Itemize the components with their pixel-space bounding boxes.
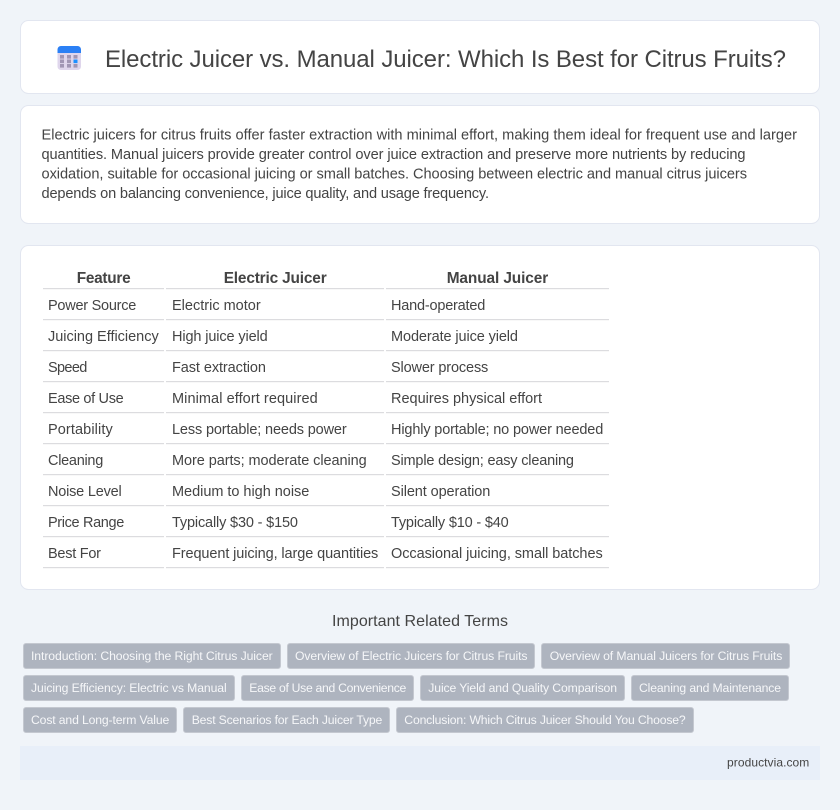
row: speed [43,360,609,382]
row: best for: Best For [48,546,101,562]
row: power source: Power Source [48,298,136,314]
row: ease of use: Ease of Use [48,391,124,407]
row: ease of use: Requires physical effort [391,391,542,407]
tag: yield and quality: Juice Yield and Quality Comparison [428,681,617,695]
row: cleaning: More parts; moderate cleaning [172,453,367,469]
row: noise level: Silent operation [391,484,490,500]
row: portability [43,422,609,444]
row: speed: Fast extraction [172,360,266,376]
row: portability: Highly portable; no power needed [391,422,603,438]
row: power source: Hand-operated [391,298,485,314]
header panel [20,20,820,94]
tag: electric overview [288,644,534,668]
section: important related terms [24,613,790,732]
row: price range [43,515,609,537]
summary paragraph: depends on balancing convenience, juice quality, and usage frequency. [42,186,489,202]
tag: efficiency: Juicing Efficiency: Electric vs Manual [31,681,227,695]
tag: cost [24,708,176,732]
tag: cleaning [632,676,788,700]
footer [20,746,820,780]
row: cleaning [43,453,609,475]
table header row: Electric Juicer [224,270,327,287]
row: noise level [43,484,609,506]
row: speed: Slower process [391,360,488,376]
tag: manual overview [542,644,790,668]
row: price range: Price Range [48,515,124,531]
tag: ease of use [242,676,414,700]
tag: electric overview: Overview of Electric Juicers for Citrus Fruits [295,649,528,663]
row: juicing efficiency: High juice yield [172,329,268,345]
row: best for: Occasional juicing, small batches [391,546,603,562]
tag: conclusion [396,708,694,732]
tag: conclusion: Conclusion: Which Citrus Juicer Should You Choose? [404,713,686,727]
row: price range: Typically $30 - $150 [172,515,298,531]
table header row: Manual Juicer [447,270,548,287]
tag: introduction [24,644,280,668]
icon: calendar [58,46,81,70]
tag: cost: Cost and Long-term Value [31,713,170,727]
row: noise level: Noise Level [48,484,122,500]
row: price range: Typically $10 - $40 [391,515,509,531]
row: power source: Electric motor [172,298,261,314]
row: cleaning: Cleaning [48,453,103,469]
table header row: Feature [77,270,131,287]
row: power source [43,298,609,320]
table header row [43,270,609,289]
row: portability: Less portable; needs power [172,422,347,438]
row: noise level: Medium to high noise [172,484,309,500]
summary paragraph: quantities. Manual juicers provide greater control over juice extraction and preserve more nutrients by reducing [42,147,746,163]
row: speed: Speed [48,360,87,376]
summary paragraph: Electric juicers for citrus fruits offer faster extraction with minimal effort, making them ideal for frequent use and larger [42,127,797,143]
footer domain: productvia.com [727,756,809,770]
summary paragraph [42,127,797,202]
panel: comparison table [20,246,820,590]
row: cleaning: Simple design; easy cleaning [391,453,574,469]
row: best for [43,546,609,568]
summary paragraph: oxidation, suitable for occasional juicing or small batches. Choosing between electric and manual citrus juicers [42,166,747,182]
title: Electric Juicer vs. Manual Juicer: Which Is Best for Citrus Fruits? [105,46,786,73]
row: juicing efficiency [43,329,609,351]
row: juicing efficiency: Moderate juice yield [391,329,518,345]
tag: yield and quality [420,676,624,700]
tag: manual overview: Overview of Manual Juicers for Citrus Fruits [550,649,782,663]
tag: cleaning: Cleaning and Maintenance [639,681,781,695]
tag: best scenarios: Best Scenarios for Each Juicer Type [192,713,383,727]
row: ease of use [43,391,609,413]
row: juicing efficiency: Juicing Efficiency [48,329,159,345]
tag: ease of use: Ease of Use and Convenience [249,681,407,695]
tag: introduction: Introduction: Choosing the Right Citrus Juicer [31,649,273,663]
panel: summary [20,106,820,224]
tag: efficiency [24,676,234,700]
row: portability: Portability [48,422,113,438]
row: best for: Frequent juicing, large quantities [172,546,378,562]
row: ease of use: Minimal effort required [172,391,318,407]
tag: best scenarios [184,708,390,732]
related terms heading: Important Related Terms [332,613,508,630]
